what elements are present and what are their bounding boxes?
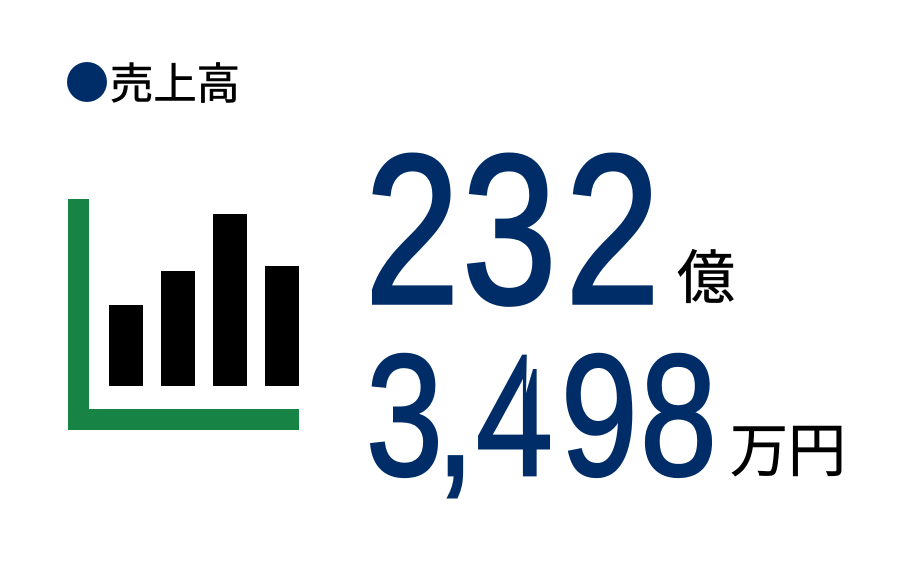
heading text: 売上高 — [110, 61, 240, 109]
unit man-en: 万円 — [730, 419, 846, 484]
bar 3 — [213, 214, 247, 386]
number 3,498: 3,498 — [366, 319, 717, 513]
notch in the 4 — [526, 344, 548, 393]
number 232: 232 — [365, 110, 660, 348]
icon: bar chart — [68, 199, 299, 430]
heading: sales — [67, 61, 240, 109]
figure: 3,498 man-en — [366, 319, 846, 513]
chart axes — [68, 199, 299, 430]
bar 1 — [109, 305, 143, 386]
icon: navy bullet — [67, 62, 107, 102]
bar 2 — [161, 271, 195, 386]
figure: 232 oku — [365, 110, 735, 348]
bar 4 — [265, 266, 299, 386]
unit oku: 億 — [677, 246, 735, 311]
